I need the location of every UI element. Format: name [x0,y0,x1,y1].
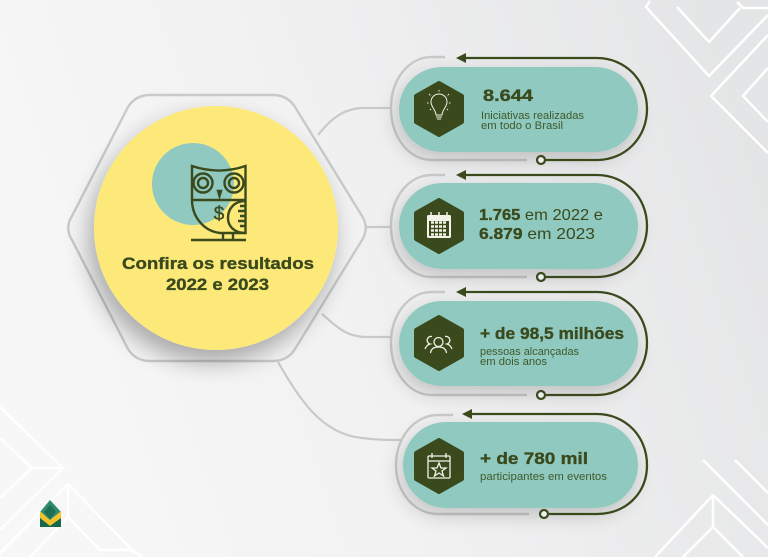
teal pill [399,183,638,269]
hexagon icon base [416,83,462,135]
title [122,254,314,294]
icon: logo [40,500,61,527]
ring [537,391,545,399]
teal pill [399,301,638,386]
arrowhead [456,53,466,63]
description [481,110,585,132]
teal pill [403,422,638,508]
grey arc [391,292,527,395]
arrowhead [456,287,466,297]
description: em todo o Brasil [481,120,563,132]
hexagon icon base [416,440,462,492]
description: pessoas alcançadas [480,346,580,358]
green arrow line [465,58,647,160]
green arrow line [471,414,647,514]
yellow circle [94,106,338,350]
connector lines [278,108,402,440]
panel: pessoas [391,287,647,399]
panel: anos [391,170,647,281]
hexagon outline [68,95,366,361]
grey arc [391,175,527,277]
values: 1.765 em 2022 e [479,207,603,224]
teal pill [399,67,638,152]
icon: calendar star [428,453,450,478]
values [479,207,603,243]
green arrow line [465,292,647,395]
description: participantes em eventos [480,471,608,483]
ring [540,510,548,518]
dollar sign: $ [214,204,225,225]
teal circle [152,143,234,225]
icon: owl [191,166,246,240]
icon: calendar [427,212,451,238]
description: Iniciativas realizadas [481,110,585,122]
ring [537,156,545,164]
value: 8.644 [483,87,534,105]
hexagon icon base [416,317,462,369]
icon: people [425,336,452,353]
panel: central circle [94,106,338,350]
grey arc [391,57,527,160]
values: 6.879 em 2023 [479,226,595,243]
hexagon icon base [416,200,462,252]
arrowhead [462,409,472,419]
ring [537,273,545,281]
value: + de 780 mil [480,449,588,468]
title: 2022 e 2023 [166,275,269,294]
panel: iniciativas [391,53,647,164]
icon: light bulb [427,90,451,119]
title: Confira os resultados [122,254,314,273]
description [480,346,580,368]
grey arc [396,415,529,514]
description: em dois anos [480,356,548,368]
value: + de 98,5 milhões [480,325,624,343]
arrowhead [456,170,466,180]
green arrow line [465,175,647,277]
panel: participantes [396,409,647,518]
